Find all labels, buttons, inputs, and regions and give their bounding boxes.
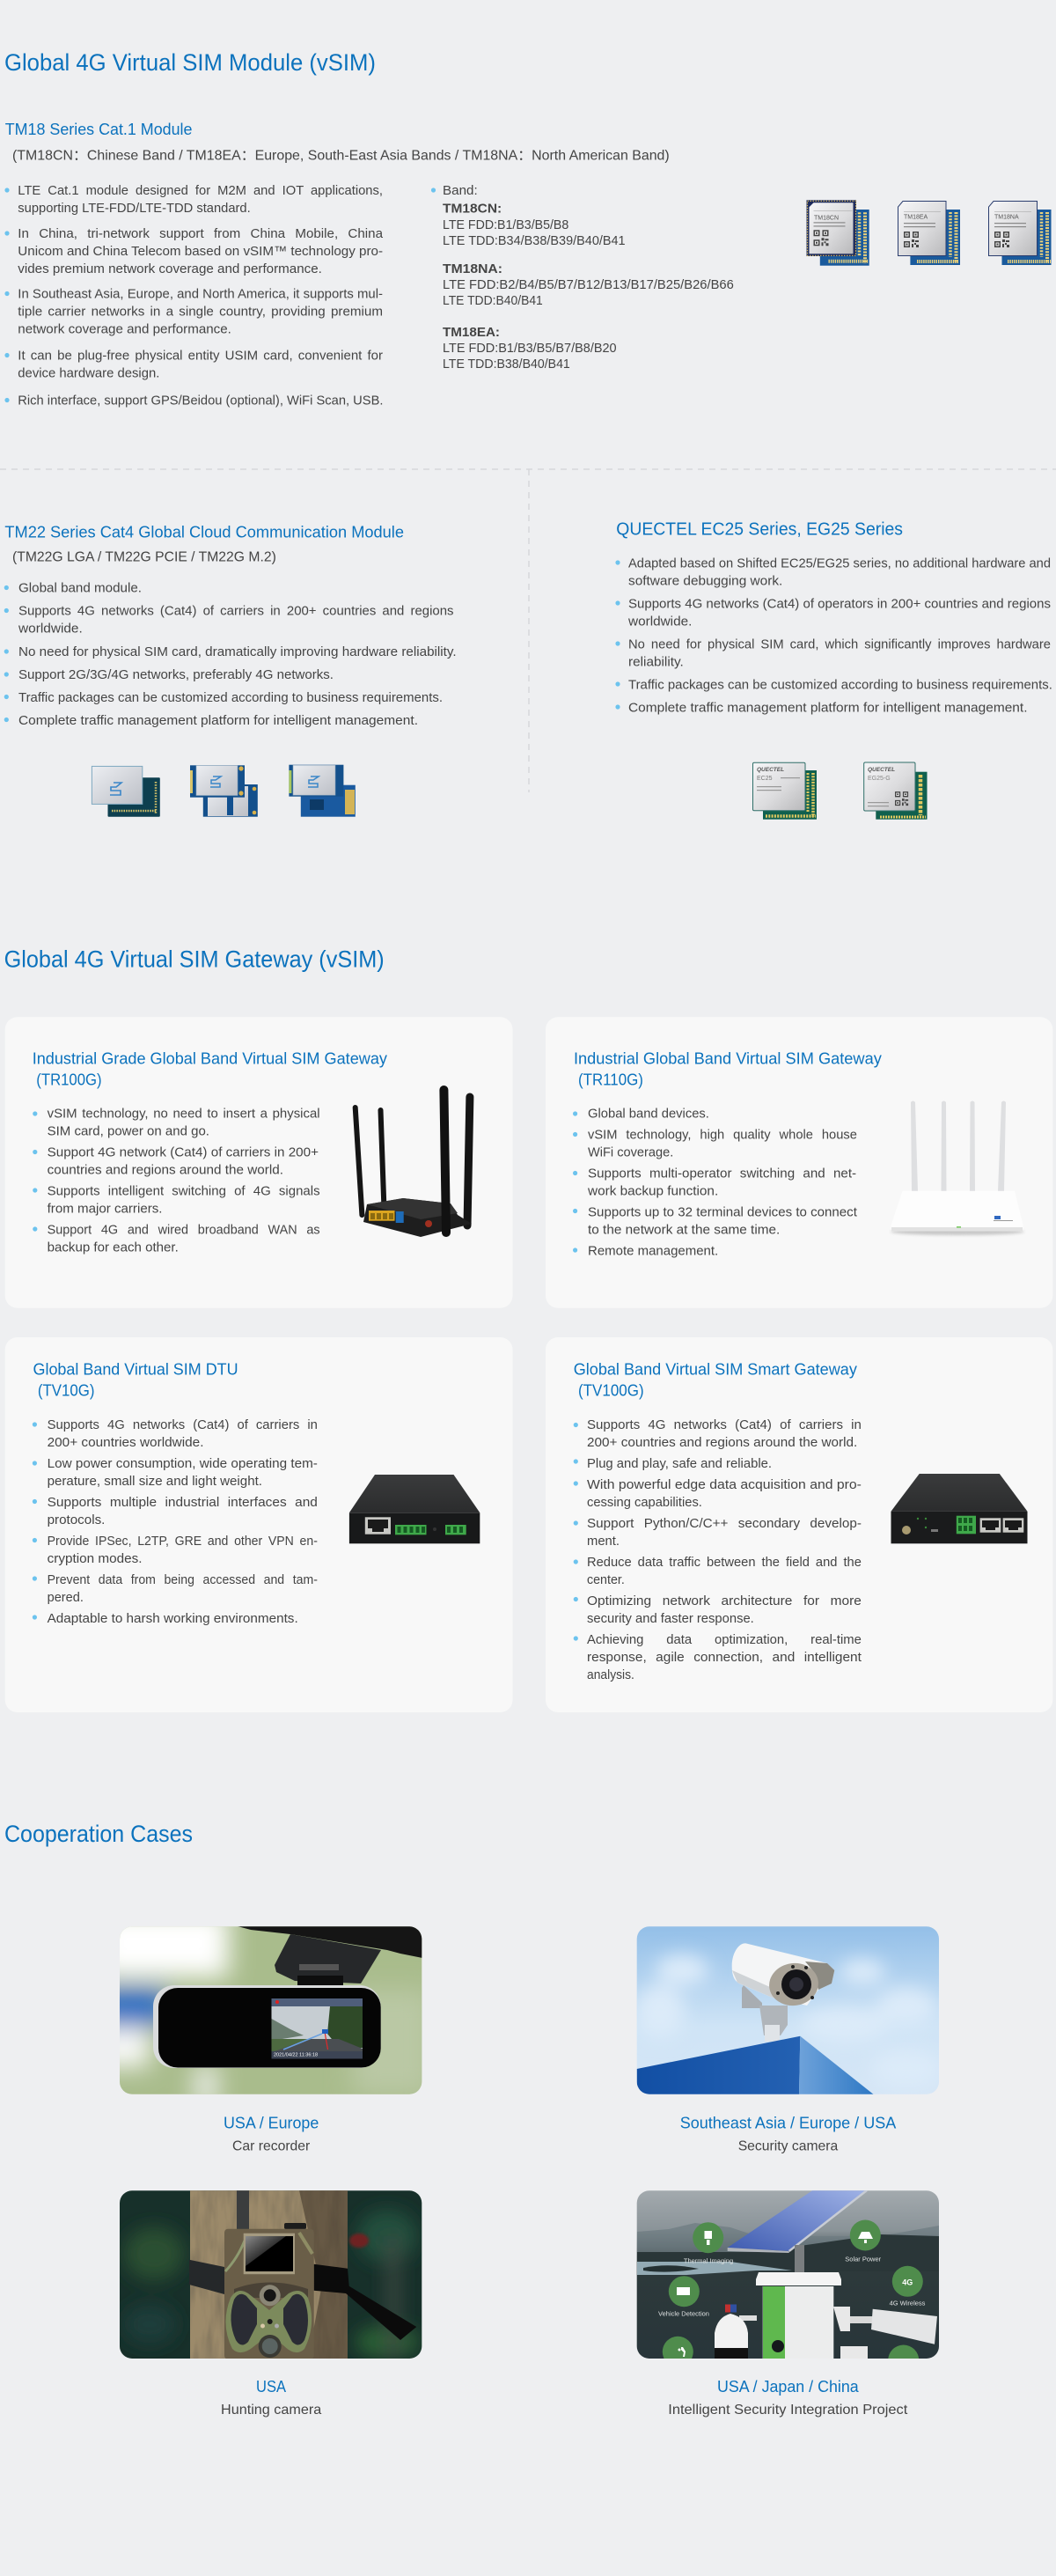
heading: TV10G: Global Band Virtual SIM DTU: [33, 1359, 238, 1378]
heading: Quectel series: QUECTEL EC25 Series, EG25 Series: [616, 520, 903, 540]
bullet list: TM22 features: Support 2G/3G/4G networks, preferably 4G networks.: [18, 667, 334, 682]
module image: TM22G PCIE: [190, 765, 258, 817]
bullet list: TV100G features: center.: [587, 1572, 625, 1587]
photo: security camera: [635, 1926, 942, 2094]
bullet list: TM22 features: Traffic packages can be customized according to business requirements.: [18, 690, 443, 705]
bullet list: TM18 features: device hardware design.: [18, 365, 159, 380]
heading: TR110G: (TR110G): [578, 1071, 643, 1089]
bullet list: TV100G features: 200+ countries and regions around the world.: [587, 1435, 857, 1450]
panel: TV10G DTU card: [5, 1337, 512, 1712]
module image: EC25: [753, 762, 817, 820]
case: intelligent security integration: [636, 2190, 940, 2418]
label: intelligent security integration project: Intelligent Security Integration Project: [668, 2403, 908, 2418]
photo: hunting camera on a tree: [120, 2190, 422, 2359]
bullet list: Quectel features: Supports 4G networks (Cat4) of operators in 200+ countries and regions: [628, 596, 1051, 611]
band list: LTE TDD:B40/B41: [443, 294, 543, 308]
band list: LTE TDD:B38/B40/B41: [443, 357, 570, 372]
icon badges: [662, 2220, 923, 2359]
bullet list: TV10G features: Low power consumption, wide operating tem-: [48, 1456, 318, 1471]
case: car recorder: [120, 1926, 422, 2150]
location: USA / Japan / China: USA / Japan / China: [717, 2377, 859, 2396]
bullet list: Quectel features: software debugging work.: [628, 573, 782, 588]
module image: TM18CN: TM18CN: [814, 215, 839, 221]
bullet list: TR110G features: vSIM technology, high quality whole house: [588, 1127, 857, 1142]
bullet list: TV100G features: cessing capabilities.: [587, 1495, 702, 1510]
photo: dash cam: [120, 1926, 422, 2094]
badge glyphs: [677, 2231, 873, 2357]
bullet list: TM18 features: supporting LTE-FDD/LTE-TDD standard.: [18, 201, 251, 216]
bullet list: Quectel features: reliability.: [628, 654, 684, 669]
heading: TV10G: (TV10G): [38, 1381, 95, 1400]
badge labels: Solar Power: [845, 2256, 882, 2263]
bullet list: TR110G features: Global band devices.: [588, 1106, 709, 1121]
bullet list: TR100G features: Supports intelligent switching of 4G signals: [48, 1183, 320, 1198]
band list: TM18CN:: [443, 202, 502, 217]
bullet list: TM18 features: network coverage and performance.: [18, 321, 231, 336]
bullet list: TV10G features: Adaptable to harsh working environments.: [48, 1611, 298, 1626]
band list: LTE FDD:B1/B3/B5/B7/B8/B20: [443, 342, 617, 356]
bullet list: TV100G features: With powerful edge data acquisition and pro-: [587, 1477, 862, 1492]
heading: TM18 series: TM18 Series Cat.1 Module: [5, 120, 193, 138]
bullet list: TV100G features: security and faster response.: [587, 1611, 754, 1626]
module image: TM18NA: TM18NA: [994, 215, 1019, 220]
module image: EC25: QUECTEL: [757, 767, 784, 773]
bullet list: TV100G features: [574, 1417, 862, 1682]
module image: EC25: EC25: [757, 776, 773, 782]
title: vSIM module section: Global 4G Virtual SIM Module (vSIM): [4, 49, 376, 76]
bullet list: TV100G features: Achieving data optimization, real-time: [587, 1632, 862, 1647]
band list: Band:: [443, 183, 478, 198]
bullet list: TR100G features: from major carriers.: [48, 1201, 162, 1216]
label: car recorder: Car recorder: [232, 2139, 311, 2154]
heading: TR110G: Industrial Global Band Virtual SIM Gateway: [574, 1049, 883, 1067]
bullet list: TV100G features: Plug and play, safe and reliable.: [587, 1456, 772, 1471]
badge labels: Thermal Imaging: [684, 2257, 733, 2264]
bullet list: TV10G features: pered.: [48, 1590, 84, 1605]
bullet list: TV10G features: Prevent data from being accessed and tam-: [48, 1572, 318, 1587]
band list: LTE FDD:B1/B3/B5/B8: [443, 218, 568, 232]
bullet list: TR110G features: work backup function.: [587, 1183, 718, 1198]
band list: LTE TDD:B34/B38/B39/B40/B41: [443, 234, 626, 248]
photo: solar security tower: [636, 2190, 940, 2375]
heading: TR110G: [574, 1049, 883, 1089]
subheading: TM22 variants: (TM22G LGA / TM22G PCIE / TM22G M.2): [12, 549, 276, 564]
bullet list: TR100G features: backup for each other.: [48, 1240, 179, 1255]
bullet list: TV10G features: 200+ countries worldwide.: [48, 1435, 203, 1450]
band list: LTE FDD:B2/B4/B5/B7/B12/B13/B17/B25/B26/B66: [443, 278, 734, 292]
bullet list: TM18 features: LTE Cat.1 module designed for M2M and IOT applications,: [18, 183, 383, 198]
case: hunting camera: [120, 2190, 422, 2418]
bullet list: TV100G features: analysis.: [587, 1667, 634, 1682]
module image: TM18NA: [989, 201, 1051, 265]
location: USA: USA: [256, 2377, 287, 2396]
bullet list: Quectel features: worldwide.: [627, 614, 692, 629]
bullet list: TM18 features: Unicom and China Telecom based on vSIM™ technology pro-: [18, 244, 383, 259]
panel: TV100G smart gateway card: [546, 1337, 1052, 1712]
location: USA / Europe: USA / Europe: [224, 2114, 319, 2132]
module image: TM22G LGA: [92, 766, 160, 817]
bullet list: Quectel features: No need for physical SIM card, which significantly improves hardware: [628, 637, 1051, 651]
panel: TR110G gateway card: [546, 1017, 1052, 1308]
bullet list: Quectel features: Traffic packages can be customized according to business requirements.: [628, 677, 1052, 692]
label: hunting camera: Hunting camera: [221, 2403, 321, 2418]
bullet list: TV10G features: protocols.: [48, 1512, 105, 1527]
panel: TR100G gateway card: [5, 1017, 512, 1308]
photo: dash cam: 2021/04/22 11:36:18: [274, 2053, 318, 2058]
bullet list: TV100G features: Support Python/C/C++ secondary develop-: [587, 1516, 862, 1531]
bullet list: TM22 features: [4, 581, 457, 728]
heading: TM22 series: TM22 Series Cat4 Global Cloud Communication Module: [4, 522, 404, 541]
badge labels: [658, 2256, 926, 2317]
label: security camera: Security camera: [738, 2139, 838, 2154]
bullet list: TR100G features: SIM card, power on and go.: [48, 1123, 209, 1138]
bullet list: TV10G features: Supports 4G networks (Cat4) of carriers in: [48, 1417, 318, 1432]
product image: black DTU: [349, 1475, 480, 1543]
panel: TM22 series: [4, 522, 457, 817]
bullet list: TR100G features: countries and regions around the world.: [48, 1162, 283, 1177]
module image: TM18EA: [898, 201, 960, 265]
bullet list: TR110G features: Supports multi-operator switching and net-: [588, 1166, 856, 1181]
bullet list: TV100G features: Supports 4G networks (Cat4) of carriers in: [587, 1417, 862, 1432]
bullet list: TM18 features: In Southeast Asia, Europe, and North America, it supports mul-: [18, 286, 383, 301]
heading: TR100G: (TR100G): [36, 1071, 102, 1089]
dashed dividers: [0, 469, 1056, 792]
bullet list: TV10G features: [33, 1417, 318, 1626]
heading: TV100G: Global Band Virtual SIM Smart Gateway: [574, 1359, 858, 1378]
bullet list: Quectel features: Adapted based on Shifted EC25/EG25 series, no additional hardware and: [628, 556, 1051, 570]
band list: [431, 183, 734, 372]
bullet list: TR110G features: to the network at the same time.: [588, 1222, 780, 1237]
bullet list: TR100G features: Support 4G network (Cat4) of carriers in 200+: [48, 1144, 319, 1159]
bullet list: TR110G features: WiFi coverage.: [588, 1144, 673, 1159]
bullet list: TM22 features: worldwide.: [18, 622, 83, 637]
heading: TR100G: Industrial Grade Global Band Virtual SIM Gateway: [33, 1049, 388, 1067]
bullet list: TM18 features: vides premium network coverage and performance.: [18, 261, 322, 276]
bullet list: TV10G features: Supports multiple industrial interfaces and: [48, 1495, 318, 1510]
badge labels: Vehicle Detection: [658, 2310, 709, 2317]
bullet list: TM18 features: It can be plug-free physical entity USIM card, convenient for: [18, 348, 383, 363]
bullet list: TV100G features: Reduce data traffic between the field and the: [587, 1555, 862, 1570]
bullet list: TR100G features: [33, 1106, 320, 1255]
band list: TM18NA:: [443, 261, 502, 276]
bullet list: TR100G features: vSIM technology, no need to insert a physical: [48, 1106, 320, 1121]
product image: black smart gateway: [891, 1474, 1028, 1543]
bullet list: TR110G features: Remote management.: [588, 1243, 718, 1258]
bullet list: TV10G features: perature, small size and light weight.: [48, 1474, 262, 1489]
module image: EG25: EG25-G: [868, 776, 891, 782]
module image: TM22G M.2: [289, 765, 356, 817]
bullet list: TM18 features: [4, 183, 384, 408]
module image: TM18EA: TM18EA: [904, 215, 928, 220]
case: security camera: [635, 1926, 942, 2154]
bullet list: TM22 features: Supports 4G networks (Cat4) of carriers in 200+ countries and regions: [18, 604, 454, 619]
heading: TV100G: [574, 1359, 858, 1400]
heading: TR100G: [33, 1049, 388, 1089]
bullet list: Quectel features: [615, 556, 1052, 715]
location: Southeast Asia / Europe / USA: Southeast Asia / Europe / USA: [680, 2114, 897, 2132]
module image: EG25: [864, 762, 928, 820]
heading: TV100G: (TV100G): [578, 1381, 644, 1400]
heading: TV10G: [33, 1359, 238, 1400]
subheading: TM18 bands: (TM18CN：Chinese Band / TM18EA：Europe, South-East Asia Bands / TM18NA：North American Band): [12, 148, 670, 164]
badge labels: 4G Wireless: [890, 2300, 926, 2307]
bullet list: TM18 features: In China, tri-network support from China Mobile, China: [18, 226, 384, 241]
module image: EG25: QUECTEL: [868, 767, 895, 773]
bullet list: TV100G features: response, agile connection, and intelligent: [587, 1650, 862, 1665]
title: vSIM gateway section: Global 4G Virtual SIM Gateway (vSIM): [4, 946, 385, 972]
bullet list: TV100G features: Optimizing network architecture for more: [587, 1593, 862, 1608]
panel: Quectel series: [615, 520, 1052, 820]
bullet list: TM18 features: Rich interface, support GPS/Beidou (optional), WiFi Scan, USB.: [18, 393, 384, 408]
product image: white 4-antenna router: [891, 1100, 1024, 1235]
bullet list: TM18 features: tiple carrier networks in a single country, providing premium: [18, 304, 383, 319]
bullet list: TM22 features: Complete traffic management platform for intelligent management.: [18, 713, 418, 728]
bullet list: TV100G features: ment.: [587, 1534, 620, 1549]
bullet list: TV10G features: Provide IPSec, L2TP, GRE and other VPN en-: [48, 1534, 318, 1549]
badge label: 4G: 4G: [902, 2278, 913, 2287]
bullet list: TV10G features: cryption modes.: [48, 1551, 143, 1566]
bullet list: TR110G features: Supports up to 32 terminal devices to connect: [588, 1204, 858, 1219]
panel: TM18 series: [4, 120, 1051, 408]
band list: TM18EA:: [443, 325, 500, 340]
bullet list: TR110G features: [573, 1106, 858, 1258]
bullet list: Quectel features: Complete traffic management platform for intelligent management.: [628, 700, 1028, 715]
bullet list: TM22 features: Global band module.: [18, 581, 142, 596]
product image: black 4-antenna router: [356, 1090, 472, 1237]
bullet list: TR100G features: Support 4G and wired broadband WAN as: [48, 1222, 320, 1237]
bullet list: TM22 features: No need for physical SIM card, dramatically improving hardware reliability.: [18, 644, 457, 659]
module image: TM18CN: [806, 200, 869, 266]
title: cooperation cases section: Cooperation Cases: [4, 1821, 193, 1847]
